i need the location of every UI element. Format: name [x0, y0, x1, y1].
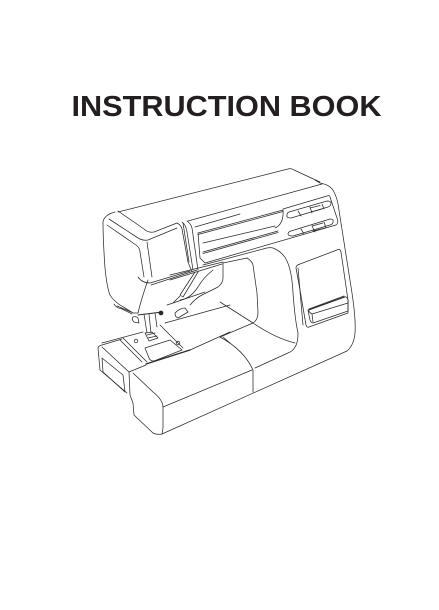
presser foot and needle — [114, 304, 163, 341]
title: INSTRUCTION BOOK — [72, 91, 382, 123]
illustration: sewing machine — [98, 169, 355, 434]
top panel and selector strips — [188, 184, 338, 263]
sewing head — [103, 211, 223, 313]
free arm extension table — [102, 305, 230, 434]
arm arch — [163, 248, 298, 407]
machine body outline — [98, 169, 355, 434]
side panel and handle — [296, 249, 348, 327]
